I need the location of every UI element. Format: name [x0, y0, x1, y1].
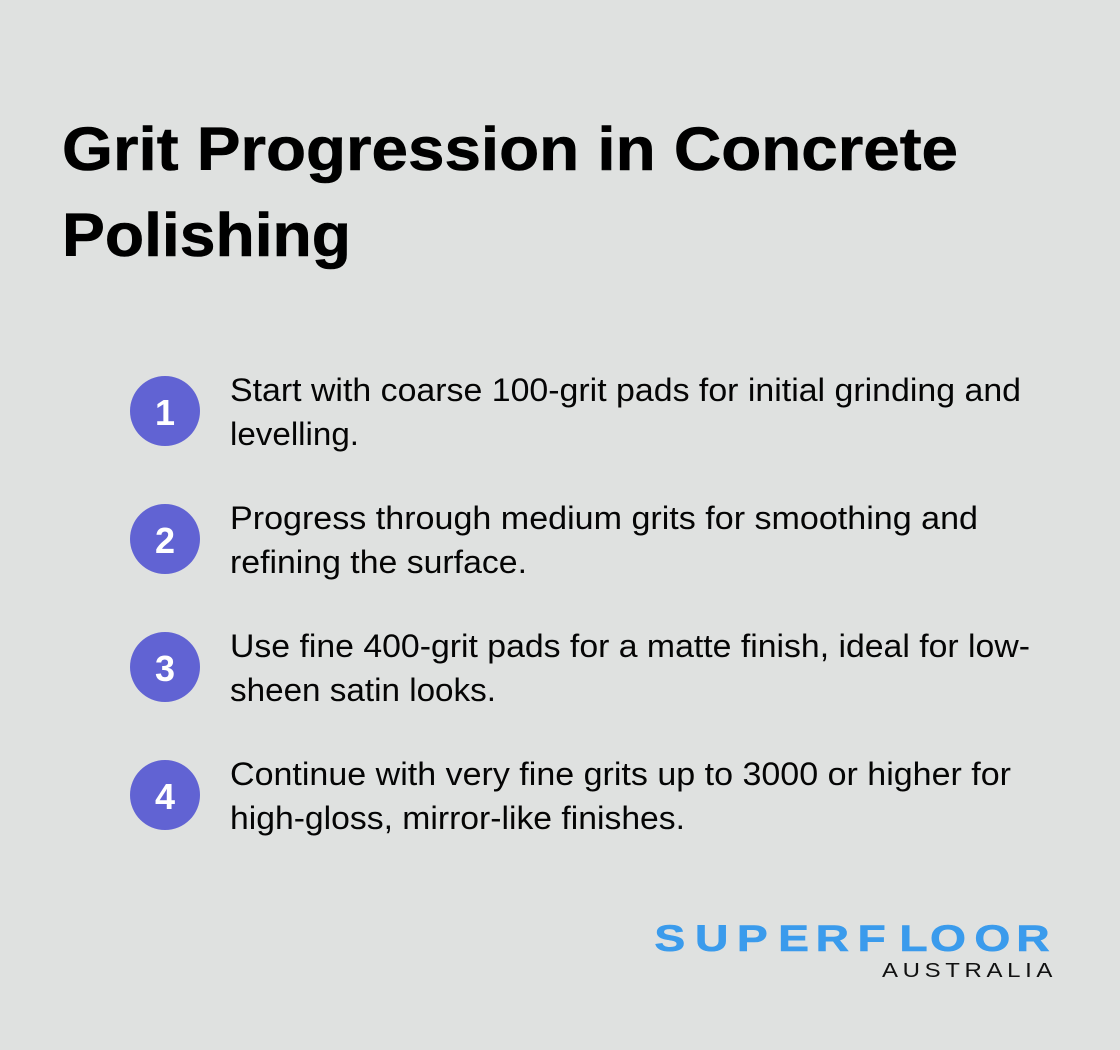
- icon: number badge 3: 3: [155, 648, 175, 689]
- step 2: [130, 500, 978, 580]
- icon: number badge 1: 1: [155, 392, 175, 433]
- step 4 text: Continue with very fine grits up to 3000 or higher for: [230, 756, 1011, 792]
- step 1 text: Start with coarse 100-grit pads for initial grinding and: [230, 372, 1021, 408]
- icon: number badge 4: 4: [155, 776, 175, 817]
- step 4 text: [230, 756, 1011, 836]
- icon: number badge 1: [130, 376, 200, 446]
- title: Grit Progression in Concrete: [62, 115, 958, 183]
- step 2 text: refining the surface.: [230, 544, 527, 580]
- icon: number badge 2: 2: [155, 520, 175, 561]
- title: [62, 115, 958, 269]
- step 3 text: Use fine 400-grit pads for a matte finish, ideal for low-: [230, 628, 1030, 664]
- title: Polishing: [62, 201, 351, 269]
- step 1 text: levelling.: [230, 416, 359, 452]
- logo: Superfloor Australia: SUPERFLOOR: [654, 917, 1050, 959]
- step 3 text: [230, 628, 1030, 708]
- step 1 text: [230, 372, 1021, 452]
- icon: number badge 2: [130, 504, 200, 574]
- logo: Superfloor Australia: [654, 917, 1053, 982]
- step 1: [130, 372, 1021, 452]
- step 2 text: Progress through medium grits for smoothing and: [230, 500, 978, 536]
- step 2 text: [230, 500, 978, 580]
- icon: number badge 4: [130, 760, 200, 830]
- logo: Superfloor Australia: AUSTRALIA: [882, 959, 1053, 982]
- icon: number badge 3: [130, 632, 200, 702]
- step 4 text: high-gloss, mirror-like finishes.: [230, 800, 685, 836]
- step 4: [130, 756, 1011, 836]
- step 3: [130, 628, 1030, 708]
- step 3 text: sheen satin looks.: [230, 672, 496, 708]
